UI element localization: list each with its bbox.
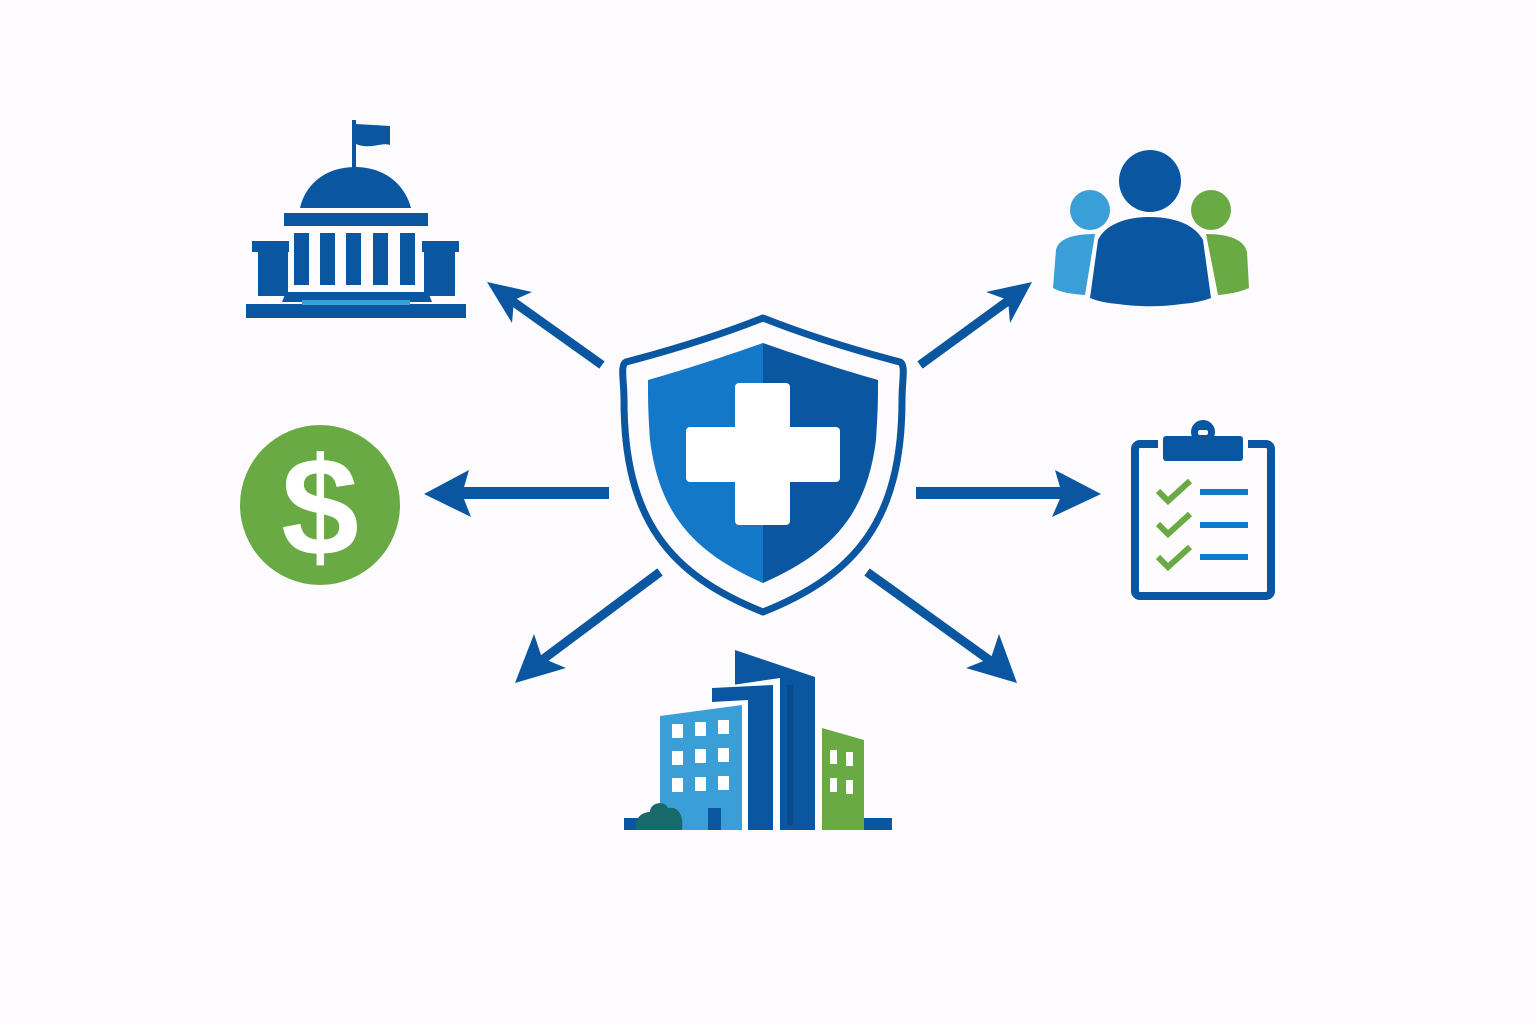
shield with medical cross — [623, 318, 903, 612]
icon: dollar coin — [240, 425, 400, 585]
arrow: to capitol — [487, 282, 602, 365]
arrow: lower right — [867, 572, 1017, 683]
icon: city buildings — [624, 650, 892, 830]
icon: checklist clipboard — [1135, 420, 1271, 596]
arrow: to buildings — [515, 572, 660, 683]
icon: capitol building — [246, 120, 466, 318]
arrow: to people — [920, 282, 1032, 365]
arrow: to clipboard — [916, 470, 1101, 517]
icon: dollar coin: $ — [281, 428, 359, 585]
arrow: to dollar — [424, 470, 609, 517]
icon: people group — [1053, 150, 1249, 306]
